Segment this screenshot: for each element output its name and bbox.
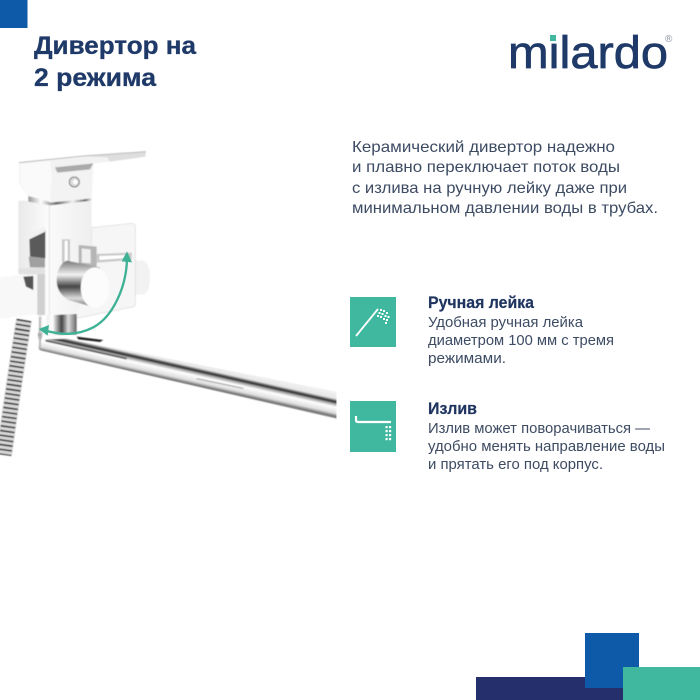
logo: milardo: milardo (508, 27, 668, 78)
logo: milardo: ® (665, 34, 673, 45)
text: hand shower: Удобная ручная лейка (428, 314, 584, 331)
text: spout: удобно менять направление воды (428, 438, 665, 455)
decorative corner square top left (0, 0, 28, 28)
spout (38, 315, 337, 419)
text: hand shower: диаметром 100 мм с тремя (428, 332, 614, 349)
heading: spout: Излив (428, 400, 477, 418)
heading: hand shower: Ручная лейка (428, 294, 535, 312)
text: hand shower (428, 314, 614, 367)
title: Дивертор на (34, 32, 197, 60)
diverter knob (57, 261, 109, 308)
intro paragraph: и плавно переключает поток воды (352, 159, 620, 176)
icon: hand shower (350, 297, 396, 347)
intro paragraph: с излива на ручную лейку даже при (352, 180, 627, 197)
text: spout (428, 420, 665, 473)
arrow: switching between modes (39, 251, 132, 336)
intro paragraph (352, 139, 658, 217)
intro paragraph: Керамический дивертор надежно (352, 139, 615, 156)
left wall block (24, 276, 34, 290)
title (34, 32, 197, 92)
faucet body (18, 201, 132, 315)
text: spout: Излив может поворачиваться — (428, 420, 650, 437)
column chrome pipe (47, 313, 77, 335)
icon: spout (350, 401, 396, 452)
chrome ring (28, 196, 92, 205)
decorative blocks bottom right (476, 633, 700, 700)
back plate and side knob (75, 223, 150, 319)
feature: spout (350, 400, 665, 473)
lever handle (19, 152, 146, 203)
hose (4, 320, 24, 455)
intro paragraph: минимальном давлении воды в трубах. (352, 200, 658, 217)
faucet illustration (0, 152, 337, 455)
feature: hand shower (350, 294, 614, 367)
text: spout: и прятать его под корпус. (428, 456, 603, 473)
text: hand shower: режимами. (428, 350, 506, 367)
title: 2 режима (34, 64, 157, 92)
